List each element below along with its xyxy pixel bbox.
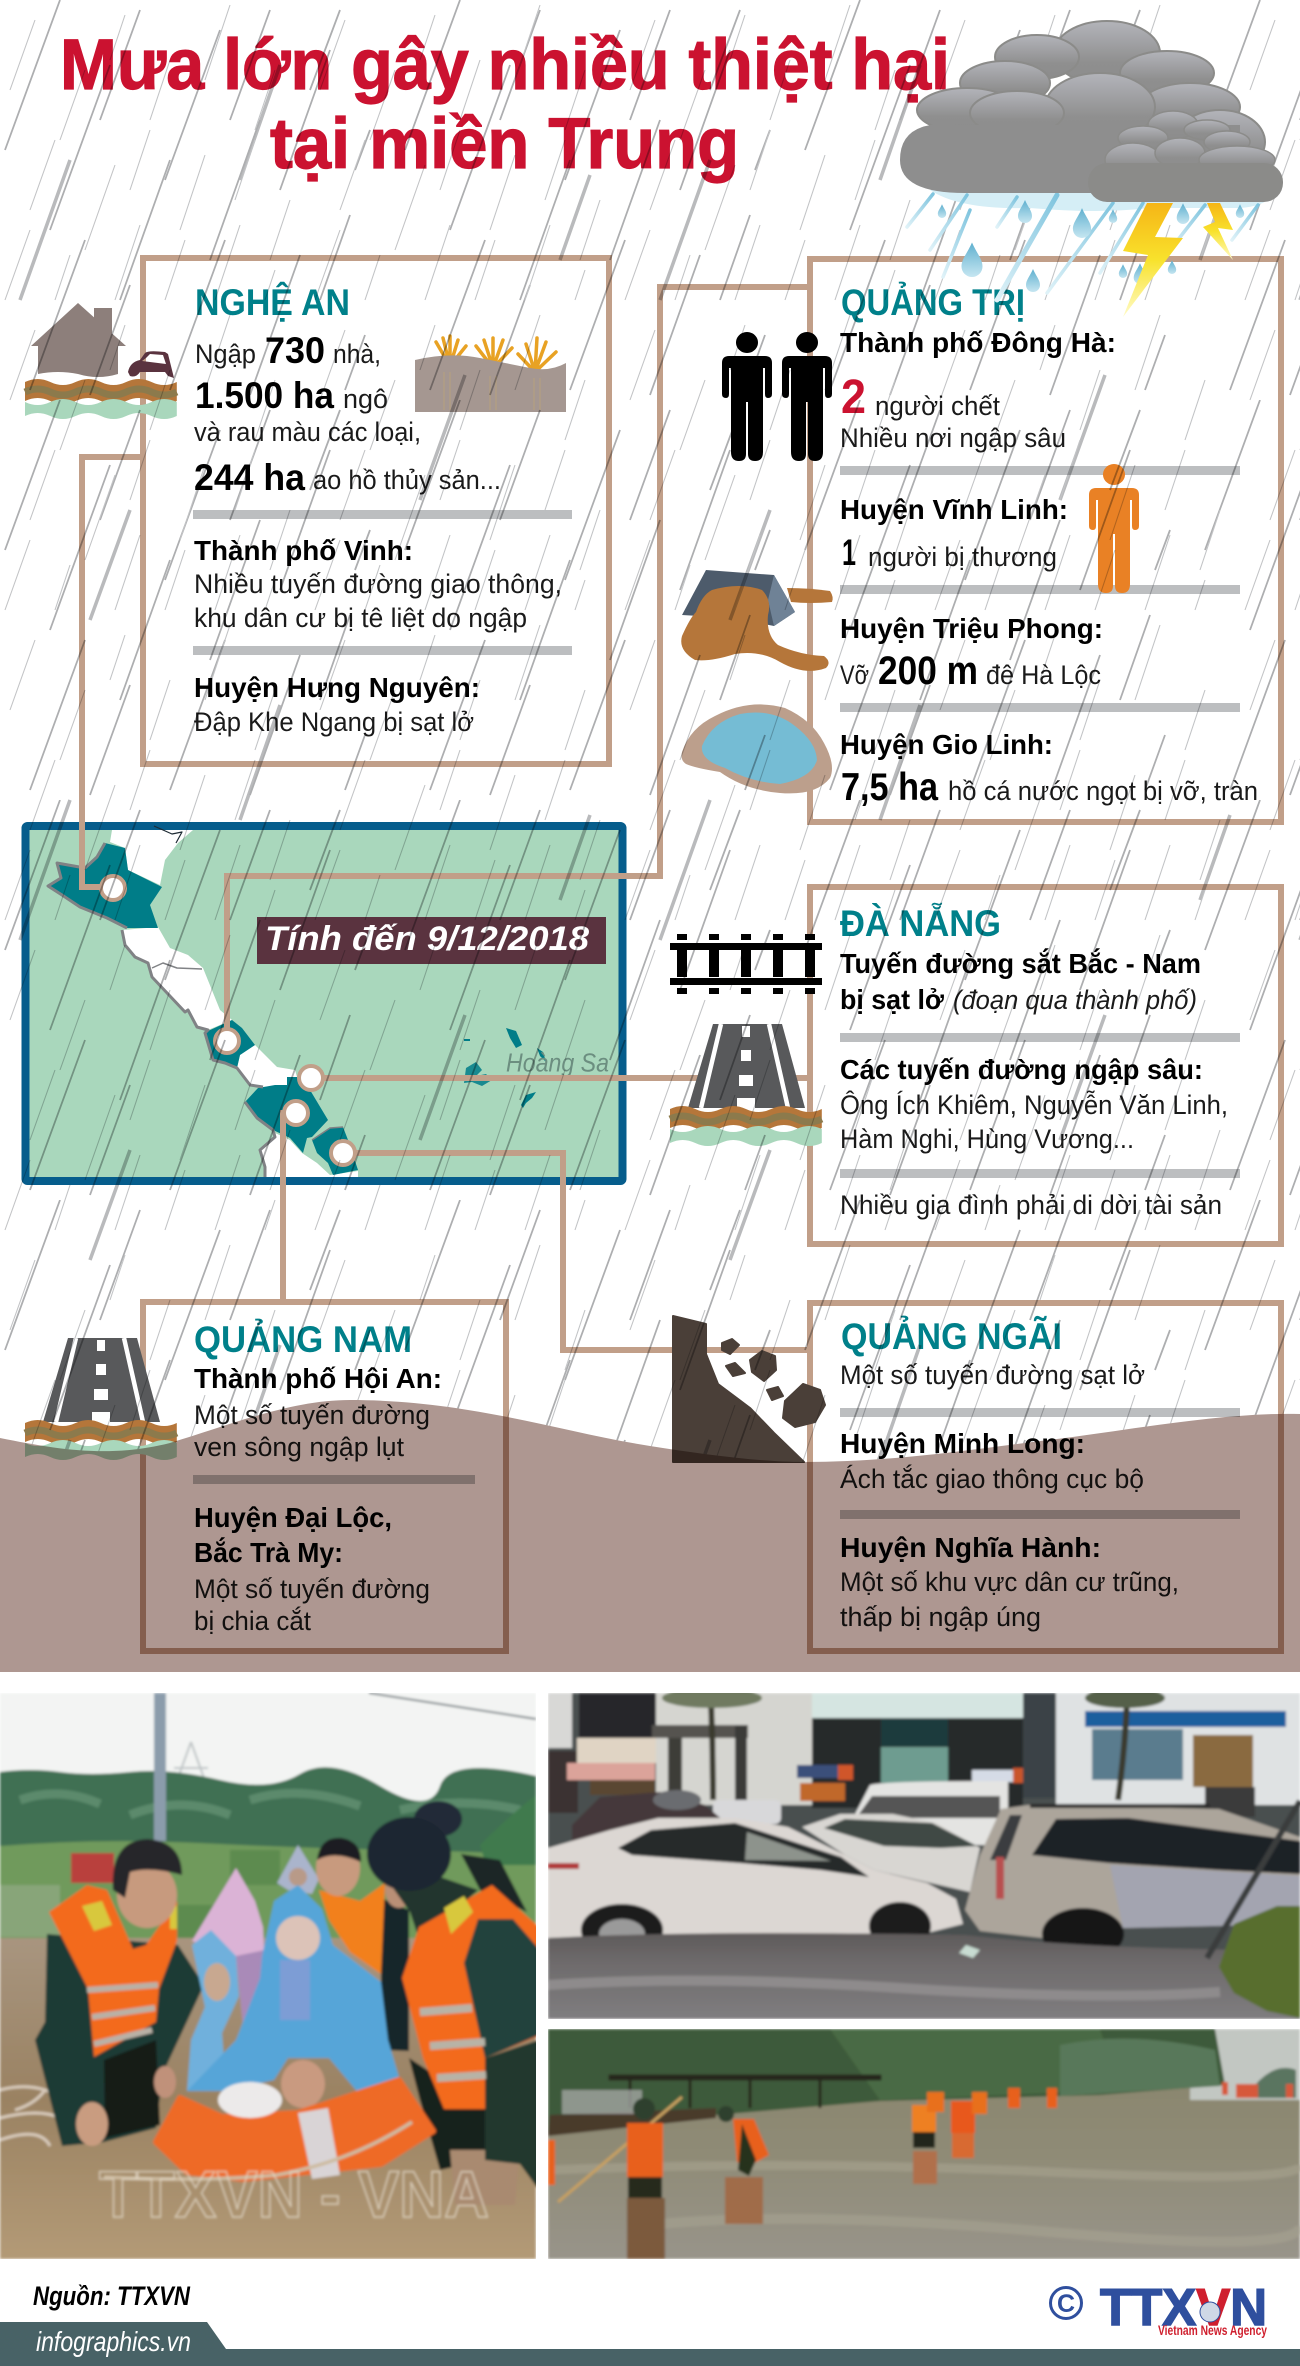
text block: Vĩnh Linh	[840, 494, 1068, 573]
blue glow under cloud	[930, 190, 1275, 211]
text block: Đại Lộc, Bắc Trà My: Bắc Trà My:	[194, 1537, 343, 1568]
text block: Vĩnh Linh: người bị thương	[868, 542, 1057, 572]
text block: damage figures	[194, 330, 501, 498]
logo: TTXVN: C	[1057, 2290, 1075, 2318]
woman in blue raincoat	[187, 1885, 399, 2095]
icon: flooded road	[670, 1024, 822, 1146]
text block: Gio Linh	[840, 729, 1258, 809]
text block: Nghĩa Hành: thấp bị ngập úng	[840, 1602, 1041, 1632]
icon: railway	[670, 934, 822, 994]
text block: flooded roads	[840, 1054, 1228, 1154]
heading: QUẢNG NAM	[194, 1319, 412, 1360]
text block: Nghĩa Hành: Huyện Nghĩa Hành:	[840, 1532, 1101, 1563]
title: Mưa lớn gây nhiều thiệt hại	[60, 26, 950, 105]
date tag: Tính đến 9/12/2018	[265, 920, 589, 958]
photo: cars in flooded street	[548, 1693, 1300, 2019]
icon: storm cloud with rain and lightning	[900, 21, 1283, 317]
large cloud	[900, 21, 1265, 193]
text block: damage figures: 730	[265, 330, 325, 371]
bush	[1219, 1906, 1300, 2018]
van	[852, 1781, 1008, 1845]
text block: Hội An	[194, 1363, 442, 1462]
silver SUV	[965, 1805, 1300, 1938]
text block: Gio Linh: hồ cá nước ngọt bị vỡ, tràn	[948, 776, 1258, 806]
footer site name: infographics.vn	[36, 2326, 191, 2357]
pink and grey raincoats	[192, 1868, 265, 2025]
map place name: Hoàng Sa	[506, 1048, 609, 1078]
lightning	[1123, 203, 1233, 317]
panel: Nghệ An	[25, 258, 609, 764]
footer bar	[0, 2322, 1300, 2366]
pole	[1207, 1801, 1300, 1958]
text block: damage figures: 1.500 ha	[195, 375, 334, 416]
text block: Triệu Phong: Vỡ	[840, 660, 869, 690]
text block: Minh Long	[840, 1428, 1144, 1494]
icon: flooded house and car	[25, 303, 177, 419]
logo: TTXVN: TTXVN	[1100, 2279, 1267, 2337]
text block: Vĩnh Linh: Huyện Vĩnh Linh:	[840, 494, 1068, 525]
map: highlighted provinces	[48, 843, 358, 1175]
text block: Triệu Phong	[840, 613, 1103, 693]
title: tại miền Trung	[270, 105, 739, 184]
text block: Nghĩa Hành: Một số khu vực dân cư trũng,	[840, 1567, 1179, 1597]
text block: Vĩnh Linh: 1	[842, 532, 856, 573]
panel: Quảng Ngãi	[673, 1303, 1281, 1651]
text block: Hội An: ven sông ngập lụt	[194, 1432, 404, 1462]
text block: railway: bị sạt lở	[840, 984, 944, 1015]
text block: railway: Tuyến đường sắt Bắc - Nam	[840, 948, 1201, 979]
text block: Thành phố Vinh	[194, 535, 562, 633]
text block: Đông Hà	[840, 327, 1116, 453]
text block: Đông Hà: Thành phố Đông Hà:	[840, 327, 1116, 358]
icon: two people dead	[722, 332, 832, 461]
text block: flooded roads: Các tuyến đường ngập sâu:	[840, 1054, 1203, 1085]
heading: NGHỆ AN	[195, 281, 350, 323]
child in blue raincoat	[187, 1930, 239, 2091]
text block: Huyện Hưng Nguyên	[194, 672, 480, 737]
text block: damage figures: ao hồ thủy sản...	[313, 465, 501, 495]
panel: Đà Nẵng	[670, 887, 1281, 1244]
text block: damage figures: 244 ha	[194, 457, 305, 498]
panel: Quảng Trị	[681, 259, 1281, 822]
connector lines	[82, 287, 807, 1350]
icon: breached fish pond	[682, 704, 832, 793]
middle rescuer	[381, 1898, 409, 2051]
small rear car	[713, 1800, 781, 1824]
text block: Hội An: Một số tuyến đường	[194, 1400, 430, 1430]
map	[26, 826, 622, 1181]
raft	[156, 2080, 433, 2179]
text block: Đại Lộc, Bắc Trà My: Một số tuyến đường	[194, 1574, 430, 1604]
map location markers	[101, 876, 355, 1165]
left rescuer	[35, 1934, 204, 2146]
rear white car	[802, 1814, 980, 1892]
text block: Gio Linh: Huyện Gio Linh:	[840, 729, 1053, 760]
icon: broken dike	[681, 570, 833, 671]
text block: Đông Hà: người chết	[875, 391, 1000, 421]
flood wave background	[0, 1400, 1300, 1672]
text block: railway: (đoạn qua thành phố)	[953, 985, 1197, 1015]
text block: damage figures: Ngập	[195, 339, 256, 369]
white sedan	[548, 1818, 963, 1938]
map: Hoàng Sa islands	[464, 1028, 546, 1108]
text block: flooded roads: Ông Ích Khiêm, Nguyễn Văn Linh,	[840, 1089, 1228, 1120]
text block: Đại Lộc, Bắc Trà My: bị chia cắt	[194, 1605, 311, 1636]
buildings	[548, 1693, 572, 1748]
icon: flooded road	[25, 1338, 177, 1460]
photo: soldiers wading in floodwater	[548, 2029, 1300, 2259]
text block: railway	[840, 948, 1201, 1015]
text block: Gio Linh: 7,5 ha	[841, 766, 938, 809]
text block: Huyện Hưng Nguyên: Huyện Hưng Nguyên:	[194, 672, 480, 703]
rope	[558, 2097, 682, 2202]
floodwater	[548, 1933, 1300, 2019]
text block: damage figures: nhà,	[333, 339, 381, 369]
text block: Đại Lộc, Bắc Trà My	[194, 1502, 430, 1636]
heading: QUẢNG NGÃI	[841, 1315, 1062, 1357]
text block: damage figures: ngô	[343, 384, 388, 414]
text block: Hội An: Thành phố Hội An:	[194, 1363, 442, 1394]
text block: Nghĩa Hành	[840, 1532, 1179, 1632]
icon: flooded crops	[415, 336, 566, 412]
text block: Đông Hà: 2	[841, 371, 866, 424]
map: inland border	[48, 826, 343, 1177]
small cloud	[1088, 111, 1283, 202]
raindrops	[938, 200, 1244, 292]
rain streaks under cloud	[907, 194, 1258, 300]
heading: ĐÀ NẴNG	[840, 903, 1001, 944]
heading: QUẢNG TRỊ	[841, 282, 1025, 323]
text block: road landslides: Một số tuyến đường sạt lở	[840, 1360, 1145, 1390]
text block: families: Nhiều gia đình phải di dời tài sản	[840, 1190, 1222, 1220]
text block: Minh Long: Ách tắc giao thông cục bộ	[840, 1463, 1144, 1494]
right rescuer	[414, 1801, 462, 1837]
title	[60, 26, 950, 184]
map land: white provinces	[110, 830, 358, 1177]
text block: damage figures: và rau màu các loại,	[194, 417, 421, 447]
text block: Minh Long: Huyện Minh Long:	[840, 1428, 1085, 1459]
text block: Đông Hà: Nhiều nơi ngập sâu	[840, 423, 1066, 453]
panel: Quảng Nam	[25, 1302, 506, 1651]
icon: landslide	[673, 1316, 825, 1462]
photo: rescuers with rubber boat	[0, 1693, 536, 2259]
photo watermark: TTXVN - VNA	[99, 2157, 489, 2231]
text block: Thành phố Vinh: Nhiều tuyến đường giao thông,	[194, 569, 562, 599]
soldiers	[548, 2082, 1293, 2259]
text block: Triệu Phong: 200 m	[878, 649, 978, 693]
text block: Thành phố Vinh: Thành phố Vinh:	[194, 535, 413, 566]
text block: Thành phố Vinh: khu dân cư bị tê liệt do ngập	[194, 603, 527, 633]
text block: Triệu Phong: Huyện Triệu Phong:	[840, 613, 1103, 644]
text block: Đại Lộc, Bắc Trà My: Huyện Đại Lộc,	[194, 1502, 392, 1533]
source note: Nguồn: TTXVN	[33, 2281, 190, 2311]
text block: flooded roads: Hàm Nghi, Hùng Vương...	[840, 1124, 1134, 1154]
dark car	[572, 1792, 725, 1845]
text block: Triệu Phong: đê Hà Lộc	[986, 660, 1101, 690]
icon: injured person	[1089, 464, 1139, 593]
text block: Huyện Hưng Nguyên: Đập Khe Ngang bị sạt lở	[194, 707, 474, 737]
